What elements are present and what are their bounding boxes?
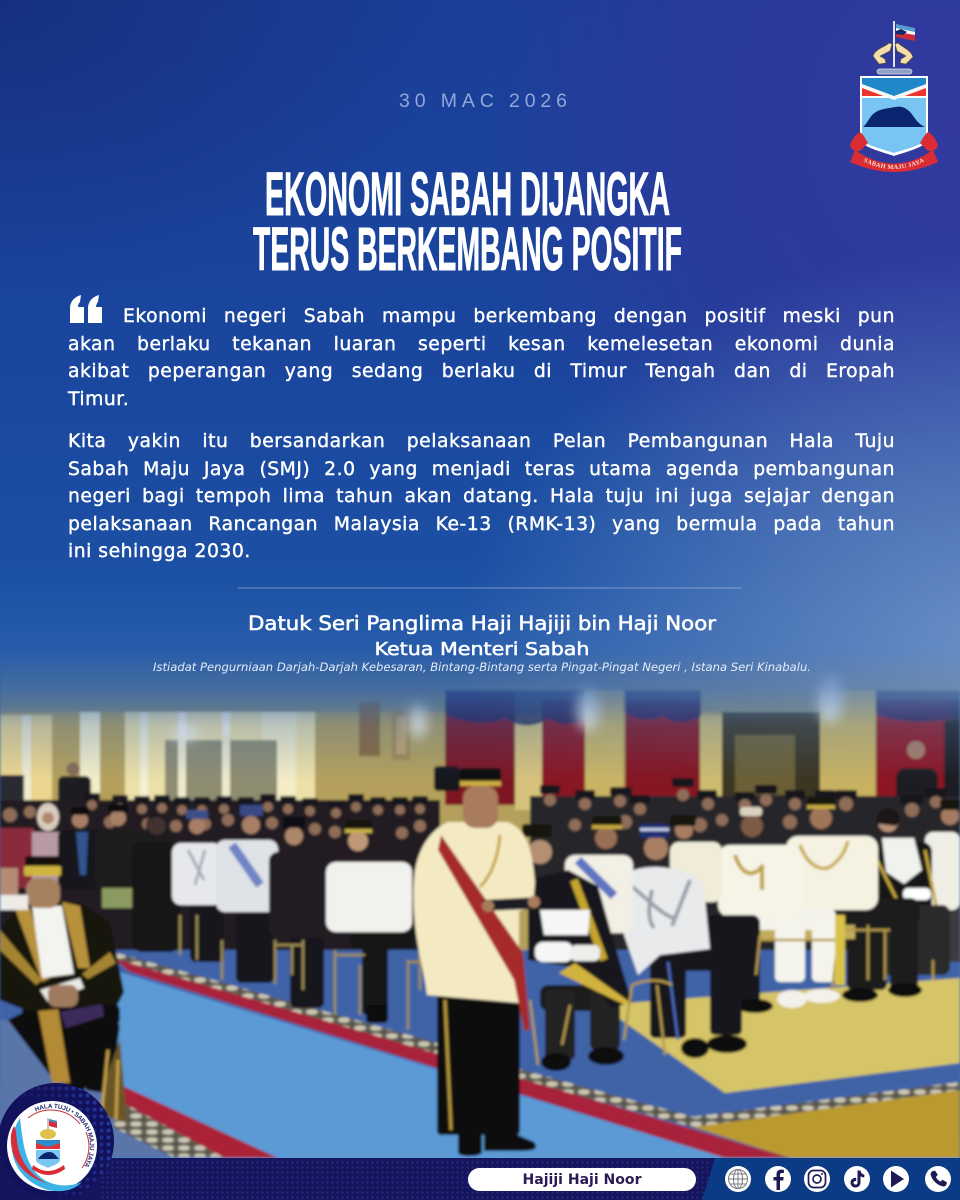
- paragraph 2: [68, 431, 895, 562]
- paragraph 2: pelaksanaan Rancangan Malaysia Ke-13 (RMK-13) yang bermula pada tahun: [68, 514, 895, 534]
- paragraph 1: akibat peperangan yang sedang berlaku di Timur Tengah dan di Eropah: [68, 361, 895, 382]
- ring text: HALA TUJU • SABAH MAJU JAYA: [34, 1104, 94, 1167]
- name pill: [468, 1168, 696, 1191]
- event photograph: [0, 664, 960, 1158]
- swoosh: [12, 1118, 82, 1191]
- paragraph 2: Sabah Maju Jaya (SMJ) 2.0 yang menjadi teras utama agenda pembangunan: [68, 458, 895, 480]
- social icons: [725, 1166, 951, 1192]
- motto ribbon: SABAH MAJU JAYA: [864, 158, 924, 170]
- paragraph 1: [68, 306, 895, 410]
- name pill: Hajiji Haji Noor: [522, 1172, 642, 1188]
- small crest: [32, 1118, 65, 1175]
- lights: [174, 674, 842, 739]
- paragraph 1: Ekonomi negeri Sabah mampu berkembang dengan positif meski pun: [123, 306, 895, 327]
- title: [253, 160, 682, 283]
- seated guests, right row: [522, 797, 960, 1071]
- footer bar: [0, 1158, 960, 1200]
- paragraph 2: negeri bagi tempoh lima tahun akan datang. Hala tuju ini juga sejajar dengan: [68, 486, 895, 507]
- speaker reading: [414, 766, 540, 1156]
- icon: youtube play: [883, 1166, 909, 1192]
- chairs: [180, 915, 424, 1030]
- opening quote mark: [70, 295, 102, 323]
- paragraph 2: Kita yakin itu bersandarkan pelaksanaan Pelan Pembangunan Hala Tuju: [68, 431, 895, 452]
- divider: [238, 588, 742, 589]
- standing figures at the back: [0, 720, 960, 813]
- paragraph 2: ini sehingga 2030.: [68, 541, 251, 562]
- attribution role: Ketua Menteri Sabah: [374, 639, 590, 660]
- floor and carpets: [0, 950, 960, 1160]
- shield: [860, 76, 928, 156]
- icon: facebook: [765, 1166, 791, 1192]
- wreath: [877, 69, 912, 74]
- crest: Sabah coat of arms: [850, 21, 938, 172]
- date: 30 MAC 2026: [399, 90, 567, 112]
- paintings: [359, 702, 410, 760]
- attribution name: Datuk Seri Panglima Haji Hajiji bin Haji Noor: [248, 612, 717, 635]
- icon: website globe: [725, 1166, 751, 1192]
- badge: Hala Tuju Sabah Maju Jaya: [0, 1083, 114, 1199]
- wall: [0, 710, 878, 952]
- photo caption: Istiadat Pengurniaan Darjah-Darjah Kebesaran, Bintang-Bintang serta Pingat-Pingat Negeri , Istana Seri Kinabalu.: [153, 660, 811, 674]
- motto ribbon: [850, 132, 938, 172]
- icon: phone: [925, 1166, 951, 1192]
- paragraph 1: akan berlaku tekanan luaran seperti kesan kemelesetan ekonomi dunia: [68, 334, 895, 354]
- seated dignitary in black and gold robe: [0, 856, 127, 1122]
- icon: tiktok: [844, 1166, 870, 1192]
- windows: [0, 712, 315, 805]
- paragraph 1: Timur.: [68, 388, 129, 410]
- seated guests, left row: [58, 804, 424, 1030]
- icon: instagram: [804, 1166, 830, 1192]
- flag and pole: [893, 21, 915, 67]
- curtains: [445, 690, 960, 810]
- seated crowd: [0, 776, 960, 952]
- arms holding pole: [873, 43, 913, 64]
